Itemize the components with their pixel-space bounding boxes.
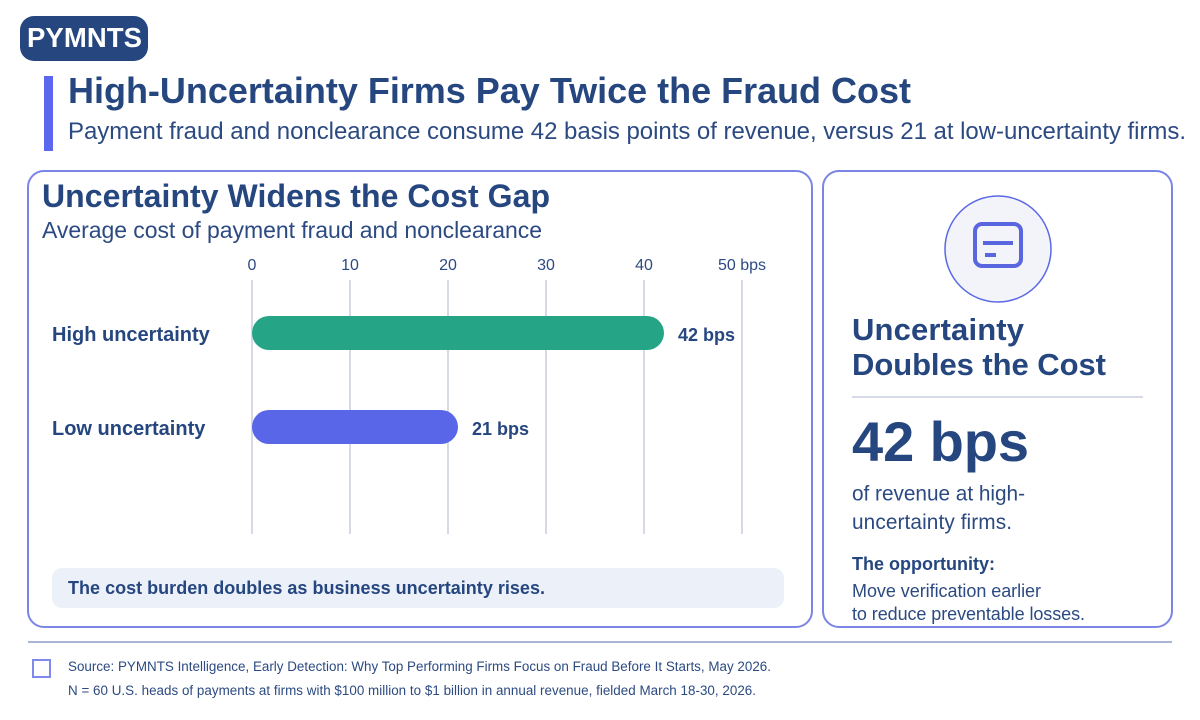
bar: low uncertainty: 21 bps	[472, 419, 529, 439]
bar: low uncertainty: Low uncertainty	[52, 418, 206, 440]
logo: PYMNTS	[20, 16, 148, 61]
logo: PYMNTS: PYMNTS	[27, 22, 142, 53]
callout: The cost burden doubles as business uncertainty rises.	[68, 578, 545, 598]
stat description	[852, 482, 1025, 534]
axis labels: 30	[537, 257, 555, 274]
stat description: uncertainty firms.	[852, 511, 1012, 534]
callout	[52, 568, 784, 608]
bar: high uncertainty	[52, 316, 735, 350]
footer source: N = 60 U.S. heads of payments at firms with $100 million to $1 billion in annual revenue, fielded March 18-30, 2026.	[68, 683, 756, 698]
bar: high uncertainty: High uncertainty	[52, 324, 211, 346]
icon: card in circle	[945, 196, 1051, 302]
title: High-Uncertainty Firms Pay Twice the Fraud Cost	[68, 70, 911, 111]
panel: key stat	[823, 171, 1172, 627]
big number: 42 bps	[852, 410, 1029, 473]
stat heading: Uncertainty	[852, 312, 1025, 347]
bar: high uncertainty: 42 bps	[678, 325, 735, 345]
axis labels: 20	[439, 257, 457, 274]
panel: cost gap chart	[28, 171, 812, 627]
opportunity note	[852, 554, 1085, 624]
footer source	[68, 659, 771, 698]
opportunity note: Move verification earlier	[852, 581, 1041, 601]
stat heading	[852, 312, 1106, 382]
subtitle: Payment fraud and nonclearance consume 42 basis points of revenue, versus 21 at low-uncertainty firms.	[68, 118, 1186, 145]
footer icon	[33, 660, 50, 677]
opportunity note: The opportunity:	[852, 554, 995, 574]
axis labels	[248, 257, 766, 274]
axis labels: 0	[248, 257, 257, 274]
footer source: Source: PYMNTS Intelligence, Early Detection: Why Top Performing Firms Focus on Fraud Before It Starts, May 2026.	[68, 659, 771, 674]
axis labels: 40	[635, 257, 653, 274]
panel heading: Uncertainty Widens the Cost Gap	[42, 178, 550, 214]
axis labels: 10	[341, 257, 359, 274]
stat heading: Doubles the Cost	[852, 347, 1106, 382]
bar chart	[52, 257, 766, 534]
opportunity note: to reduce preventable losses.	[852, 604, 1085, 624]
bar: low uncertainty	[52, 410, 529, 444]
axis labels: 50 bps	[718, 257, 766, 274]
panel subheading: Average cost of payment fraud and nonclearance	[42, 217, 542, 243]
stat description: of revenue at high-	[852, 482, 1025, 506]
title accent bar	[44, 76, 53, 151]
